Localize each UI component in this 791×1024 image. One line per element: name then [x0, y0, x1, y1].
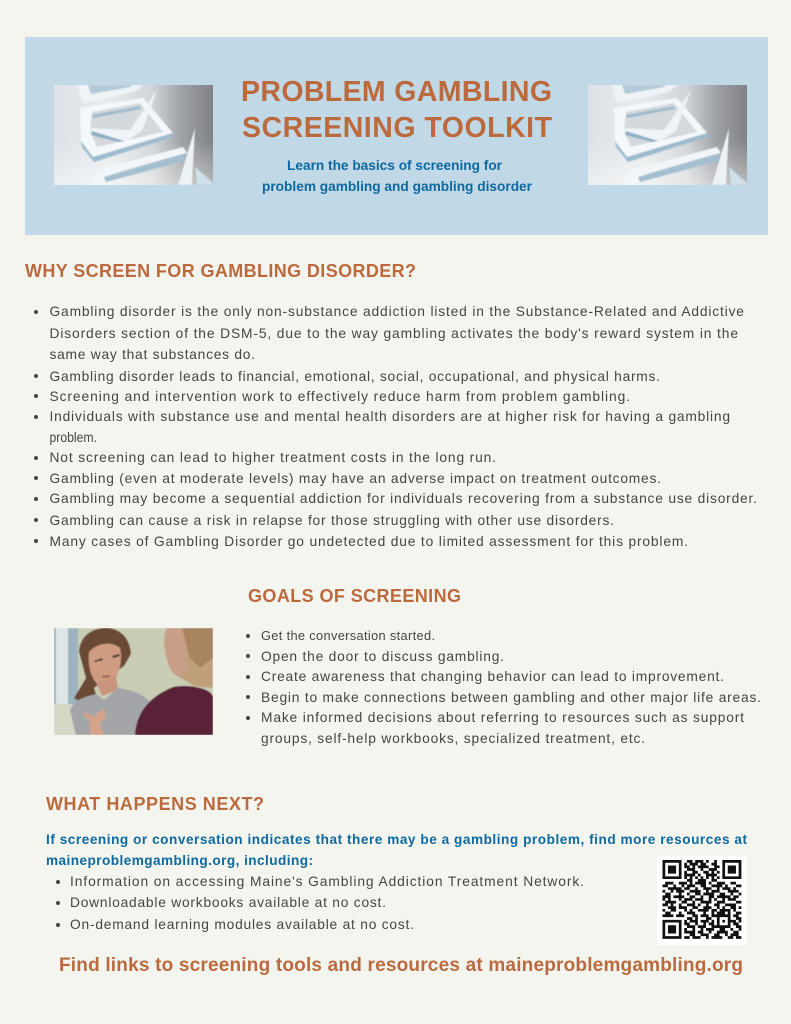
bullet list: why screen: Many cases of Gambling Disorder go undetected due to limited assessment for this problem.	[50, 534, 688, 549]
subtitle	[262, 158, 533, 194]
bullet list: resources	[56, 874, 584, 932]
image: left checklist photo	[54, 85, 213, 185]
heading: goals of screening: GOALS OF SCREENING	[248, 586, 461, 606]
image: two women in conversation	[54, 628, 213, 735]
bullet list: why screen: Not screening can lead to higher treatment costs in the long run.	[50, 450, 496, 465]
bullet list: why screen: Gambling (even at moderate levels) may have an adverse impact on treatment outcomes.	[50, 471, 661, 486]
bullet list: why screen	[34, 304, 757, 549]
footer call to action: Find links to screening tools and resources at maineproblemgambling.org	[59, 955, 743, 976]
bullet list: why screen: Disorders section of the DSM-5, due to the way gambling activates the body's reward system in the	[50, 326, 738, 341]
subtitle: problem gambling and gambling disorder	[262, 179, 533, 194]
bullet list: why screen: Screening and intervention work to effectively reduce harm from problem gambling.	[50, 389, 630, 404]
title	[241, 76, 553, 144]
bullet list: why screen: Gambling can cause a risk in relapse for those struggling with other use disorders.	[50, 513, 614, 528]
bullet list: why screen: same way that substances do.	[50, 347, 255, 362]
callout: find more resources	[46, 832, 747, 868]
bullet list: resources: Downloadable workbooks available at no cost.	[70, 895, 386, 910]
bullet list: goals: Get the conversation started.	[261, 628, 435, 643]
bullet list: resources: Information on accessing Maine's Gambling Addiction Treatment Network.	[70, 874, 584, 889]
bullet list: why screen: Gambling disorder leads to financial, emotional, social, occupational, and physical harms.	[50, 369, 660, 384]
subtitle: Learn the basics of screening for	[287, 158, 503, 173]
bullet list: goals: Create awareness that changing behavior can lead to improvement.	[261, 669, 724, 684]
heading: what happens next: WHAT HAPPENS NEXT?	[46, 794, 264, 814]
bullet list: why screen: problem.	[50, 430, 97, 445]
bullet list: goals: Begin to make connections between gambling and other major life areas.	[261, 690, 761, 705]
callout: find more resources: If screening or conversation indicates that there may be a gambling problem, find more resources at	[46, 832, 747, 847]
bullet list: why screen: Gambling disorder is the only non-substance addiction listed in the Substance-Related and Addictive	[50, 304, 744, 319]
bullet list: goals: groups, self-help workbooks, specialized treatment, etc.	[261, 731, 645, 746]
bullet list: goals: Make informed decisions about referring to resources such as support	[261, 710, 744, 725]
bullet list: why screen: Individuals with substance use and mental health disorders are at higher risk for having a gambling	[50, 409, 730, 424]
bullet list: goals	[246, 628, 761, 746]
title: PROBLEM GAMBLING	[241, 76, 552, 108]
image: right checklist photo	[588, 85, 747, 185]
title: SCREENING TOOLKIT	[242, 112, 553, 144]
panel: header banner	[25, 37, 768, 235]
icon: QR code	[657, 856, 747, 945]
bullet list: why screen: Gambling may become a sequential addiction for individuals recovering from a substance use disorder.	[50, 491, 757, 506]
bullet list: resources: On-demand learning modules available at no cost.	[70, 917, 414, 932]
heading: why screen: WHY SCREEN FOR GAMBLING DISORDER?	[25, 261, 416, 281]
bullet list: goals: Open the door to discuss gambling.	[261, 649, 504, 664]
callout: find more resources: maineproblemgambling.org, including:	[46, 853, 313, 868]
